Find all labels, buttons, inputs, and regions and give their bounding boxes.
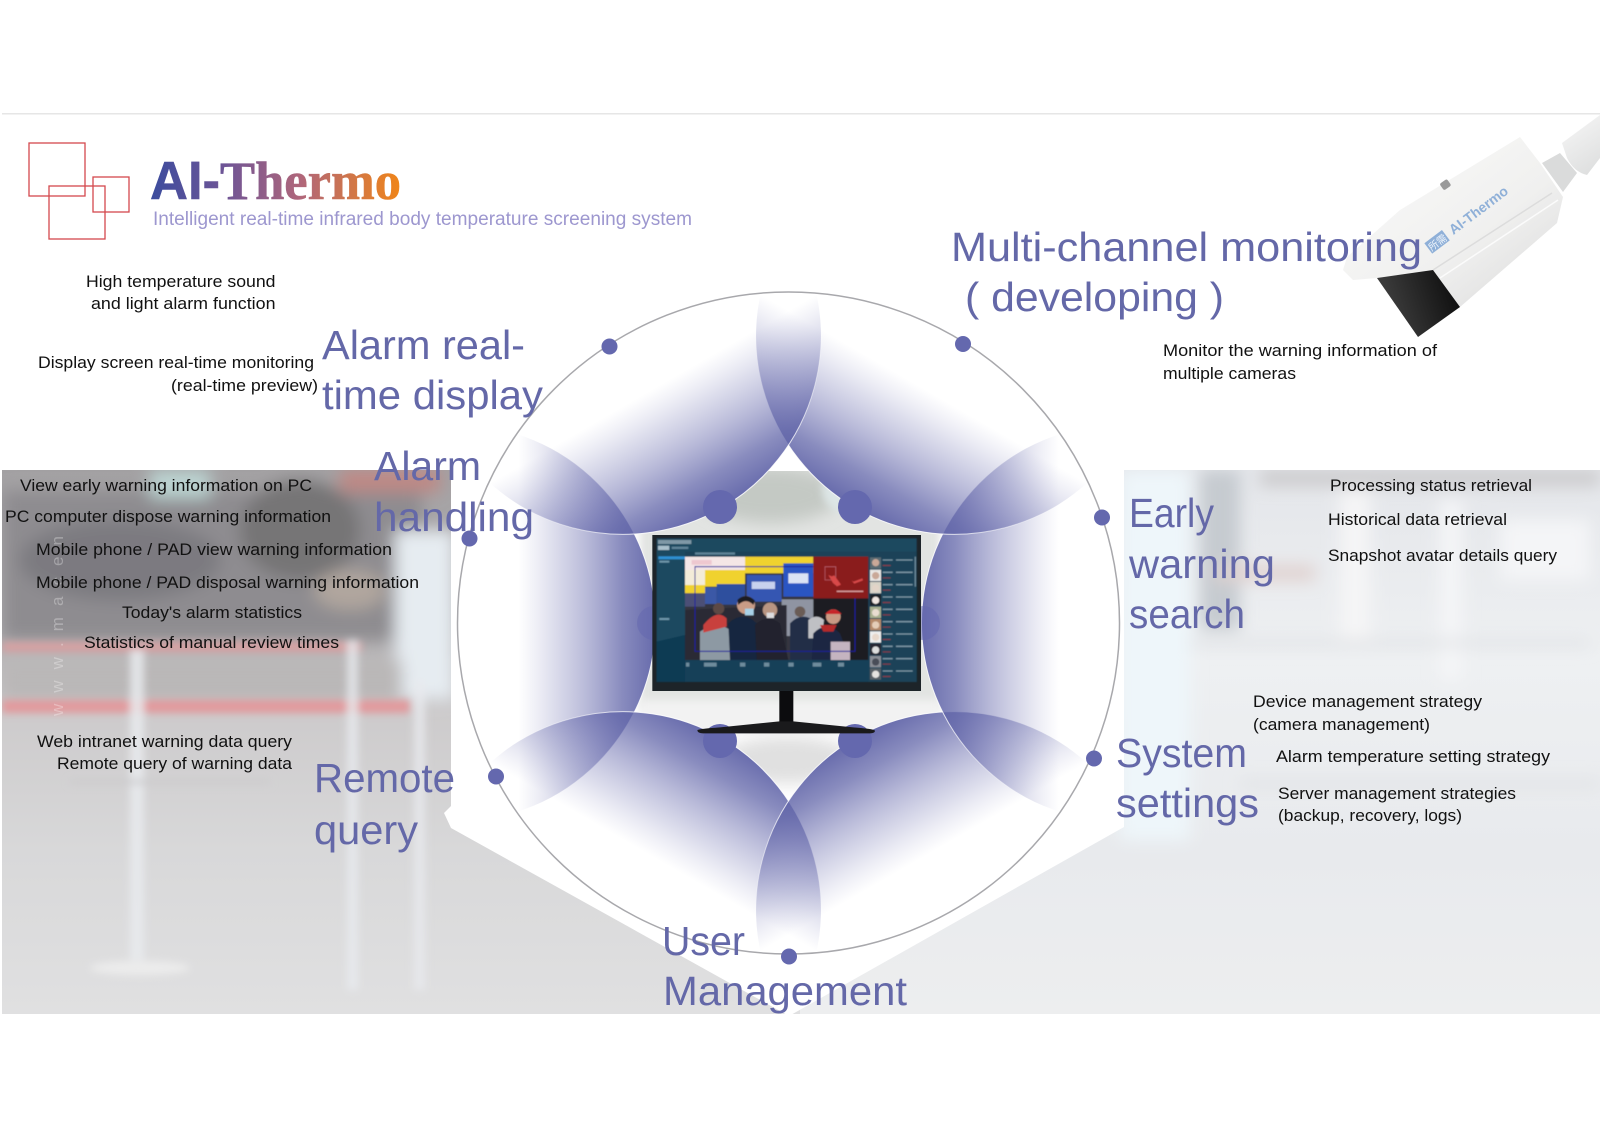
heading: user management [662, 918, 908, 1014]
petal right [922, 425, 1318, 821]
heading: alarm real-time display: time display [322, 372, 543, 418]
centre photo behind monitor [640, 465, 940, 784]
petal top left [353, 66, 893, 607]
heading: multi-channel monitoring [951, 224, 1422, 320]
text: alarm handling details [5, 476, 419, 652]
title: AI-Thermo [150, 151, 401, 211]
text: system settings details: Device management strategy [1253, 692, 1483, 711]
text: alarm display details: High temperature sound [86, 272, 276, 291]
heading: system settings [1116, 730, 1259, 826]
heading: user management: User [662, 918, 745, 964]
text: remote query details: Remote query of warning data [57, 754, 293, 773]
camera illustration [1343, 115, 1600, 337]
text: early warning details: Historical data retrieval [1328, 510, 1507, 529]
alarm face list [868, 552, 917, 682]
text: system settings details: (camera management) [1253, 715, 1430, 734]
heading: early warning search [1128, 490, 1275, 637]
watermark: www.macen [48, 536, 67, 717]
subtitle: Intelligent real-time infrared body temperature screening system [153, 209, 692, 230]
heading: alarm handling: Alarm [374, 443, 481, 489]
text: system settings details [1253, 692, 1551, 825]
outer ring [458, 292, 1120, 954]
heading: early warning search: Early [1129, 490, 1214, 536]
text: system settings details: Server management strategies [1278, 784, 1516, 803]
monitor [652, 535, 921, 733]
text: early warning details: Processing status retrieval [1330, 476, 1532, 495]
heading: early warning search: warning [1128, 541, 1275, 587]
ring petals [260, 66, 1318, 1130]
camera label: AI-Thermo [1446, 183, 1511, 238]
white centre mask [444, 460, 1124, 1016]
camera mount [1562, 115, 1600, 175]
inner dots [637, 490, 940, 758]
text: alarm handling details: Today's alarm statistics [122, 603, 302, 622]
heading: remote query [314, 755, 455, 853]
heading: system settings: settings [1116, 780, 1259, 826]
text: alarm display details: and light alarm function [91, 294, 276, 313]
petal bottom left [353, 639, 893, 1130]
text: multi-channel details [1163, 341, 1437, 383]
camera label [1423, 183, 1511, 254]
logo squares [29, 143, 129, 239]
monitor bezel [652, 535, 921, 691]
background photo: left blurred queue hall [2, 470, 802, 1014]
text: alarm handling details: Statistics of manual review times [84, 633, 339, 652]
text: multi-channel details: Monitor the warning information of [1163, 341, 1437, 360]
heading: multi-channel monitoring: Multi-channel monitoring [951, 224, 1422, 270]
video snapshot [685, 557, 868, 660]
heading: early warning search: search [1129, 591, 1245, 637]
camera body [1343, 137, 1563, 307]
text: alarm handling details: Mobile phone / PAD view warning information [36, 540, 392, 559]
text: remote query details: Web intranet warning data query [37, 732, 293, 751]
text: alarm display details: Display screen real-time monitoring [38, 353, 314, 372]
text: early warning details [1328, 476, 1558, 565]
heading: system settings: System [1116, 730, 1247, 776]
heading: alarm handling: handling [374, 494, 534, 540]
text: early warning details: Snapshot avatar details query [1328, 546, 1558, 565]
camera hood [1377, 270, 1460, 337]
text: alarm display details: (real-time preview) [171, 376, 318, 395]
heading: multi-channel monitoring: ( developing ) [965, 274, 1224, 320]
heading: user management: Management [663, 968, 908, 1014]
heading: alarm handling [374, 443, 534, 540]
text: remote query details [37, 732, 293, 773]
text: system settings details: Alarm temperature setting strategy [1276, 747, 1551, 766]
text: multi-channel details: multiple cameras [1163, 364, 1296, 383]
text: alarm handling details: View early warning information on PC [20, 476, 312, 495]
text: alarm handling details: Mobile phone / PAD disposal warning information [36, 573, 419, 592]
camera label: 所需 [1426, 232, 1450, 254]
monitor screen [657, 538, 917, 682]
background photo: right blurred hall [800, 470, 1600, 1014]
ring marker dots [462, 336, 1110, 964]
heading: alarm real-time display: Alarm real- [322, 322, 525, 368]
heading: alarm real-time display [322, 322, 543, 418]
heading: remote query: query [314, 807, 419, 853]
text: system settings details: (backup, recovery, logs) [1278, 806, 1462, 825]
petal bottom right [684, 639, 1224, 1130]
text: alarm display details [38, 272, 318, 395]
petal top right [684, 66, 1224, 607]
text: alarm handling details: PC computer dispose warning information [5, 507, 331, 526]
petal left [260, 425, 656, 821]
monitor stand [697, 690, 875, 733]
heading: remote query: Remote [314, 755, 455, 801]
